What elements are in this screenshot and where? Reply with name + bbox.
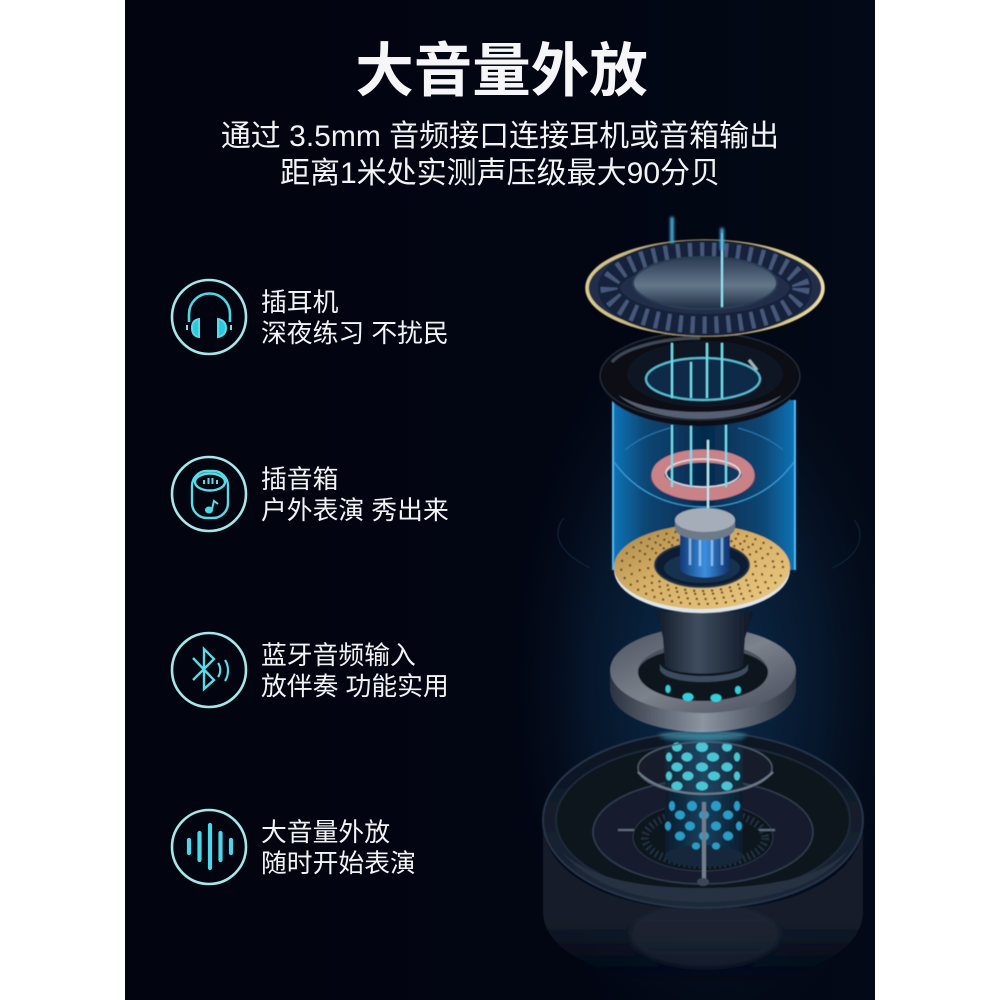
label: bluetooth: 蓝牙音频输入: [261, 641, 416, 670]
pink ring: [652, 455, 754, 499]
driver diaphragm: [587, 233, 823, 335]
subtitle: 距离1米处实测声压级最大90分贝: [280, 157, 720, 190]
subtitle: 通过 3.5mm 音频接口连接耳机或音箱输出: [221, 120, 779, 153]
label: loud playback: 大音量外放: [261, 818, 390, 847]
description: loud playback: 随时开始表演: [261, 849, 416, 878]
base housing: [543, 732, 863, 984]
speaker exploded view: [543, 217, 863, 984]
icon: bluetooth: [172, 633, 246, 707]
feature: speaker: [172, 457, 449, 531]
description: speaker: 户外表演 秀出来: [261, 496, 449, 525]
feature: bluetooth: [172, 633, 449, 707]
top light beams: [672, 217, 722, 250]
cone pole: [657, 612, 753, 682]
magnet ring: [610, 627, 796, 740]
icon: headphones: [172, 280, 246, 354]
background panel: [125, 0, 905, 1000]
icon: sound wave: [172, 810, 246, 884]
feature: headphones: [172, 280, 449, 354]
label: headphones: 插耳机: [261, 288, 339, 317]
dotted voice coil column: [638, 738, 773, 886]
black ring: [600, 332, 800, 426]
light beams lower: [672, 425, 726, 509]
title: 大音量外放: [355, 39, 648, 104]
description: headphones: 深夜练习 不扰民: [261, 319, 449, 348]
label: speaker: 插音箱: [261, 465, 338, 494]
blue centre stem and silver cap: [675, 508, 735, 578]
subtitle: [221, 120, 779, 190]
description: bluetooth: 放伴奏 功能实用: [261, 672, 449, 701]
faint orbit arcs: [558, 518, 860, 568]
icon: speaker: [172, 457, 246, 531]
feature: loud playback: [172, 810, 416, 884]
blue cylinder: [613, 400, 795, 570]
gold perforated ring: [614, 525, 790, 613]
